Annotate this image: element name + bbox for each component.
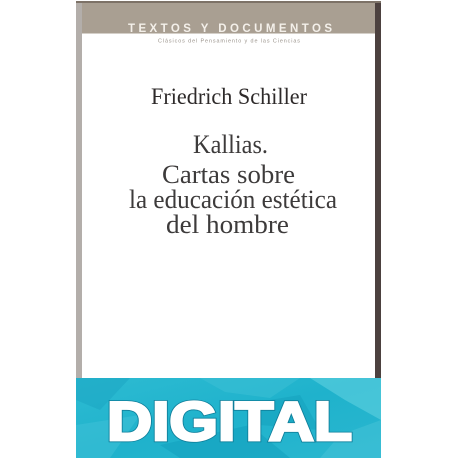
digital label bbox=[107, 390, 352, 452]
title line 3: la educación estética bbox=[129, 185, 337, 214]
digital banner bbox=[76, 378, 381, 458]
left spine strip bbox=[76, 3, 82, 378]
series subtitle: Clásicos del Pensamiento y de las Ciencias bbox=[158, 38, 300, 44]
title line 1: Kallias. bbox=[193, 130, 268, 159]
title line 4: del hombre bbox=[166, 210, 289, 239]
polygon pattern bbox=[76, 378, 130, 410]
label fill: DIGITAL bbox=[107, 390, 352, 452]
book cover bbox=[76, 1, 381, 378]
series title: TEXTOS Y DOCUMENTOS bbox=[128, 23, 332, 35]
right spine strip bbox=[375, 3, 381, 378]
book title bbox=[129, 130, 337, 239]
header band bbox=[82, 3, 375, 34]
author name: Friedrich Schiller bbox=[151, 84, 307, 109]
title line 2: Cartas sobre bbox=[162, 160, 295, 189]
top edge bbox=[76, 1, 381, 3]
label outline: DIGITAL bbox=[107, 390, 352, 452]
